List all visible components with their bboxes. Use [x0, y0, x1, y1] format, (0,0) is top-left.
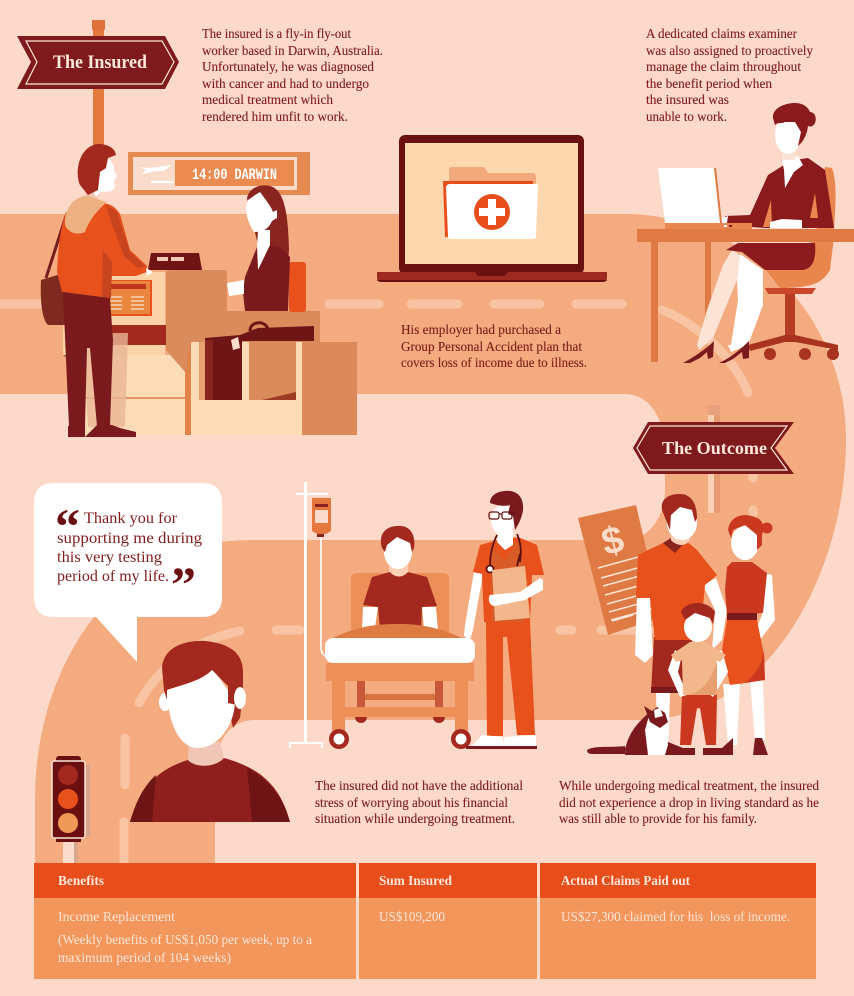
text block: no financial stress: stress of worrying about his financial [315, 795, 508, 810]
text block: no financial stress: situation while undergoing treatment. [315, 811, 515, 826]
text block: no financial stress: The insured did not have the additional [315, 778, 523, 793]
text block: claims examiner: was also assigned to proactively [646, 43, 813, 58]
text block: living standard: was still able to provide for his family. [559, 811, 757, 826]
speech bubble with quote: “ [55, 498, 80, 554]
speech bubble with quote [34, 483, 222, 662]
flight departure board: 14:00 DARWIN [192, 166, 277, 184]
icon: traffic light [52, 756, 90, 863]
text block: claims examiner: the benefit period when [646, 76, 772, 91]
speech bubble with quote: this very testing [57, 549, 162, 566]
banner: The Insured [17, 36, 179, 89]
benefits table: Actual Claims Paid out [561, 874, 690, 889]
speech bubble with quote: ” [171, 556, 196, 612]
road lane markings [0, 304, 753, 863]
text block: the insured: medical treatment which [202, 92, 333, 107]
benefits table: Benefits [58, 874, 105, 889]
laptop on desk [637, 168, 854, 242]
text block: employer plan [401, 322, 587, 370]
receipt with dollar sign: $ [598, 518, 628, 564]
person: doctor with clipboard [464, 491, 544, 749]
signpost: The Insured [17, 20, 179, 146]
benefits table: (Weekly benefits of US$1,050 per week, up to a [58, 933, 313, 948]
family: father [635, 494, 727, 755]
text block: claims examiner: manage the claim throughout [646, 59, 801, 74]
benefits table: maximum period of 104 weeks) [58, 951, 231, 966]
benefits table: Income Replacement [58, 910, 175, 925]
benefits table: US$109,200 [379, 910, 445, 925]
portrait: the insured [130, 641, 290, 822]
text block: the insured: with cancer and had to undergo [202, 76, 369, 91]
speech bubble with quote: supporting me during [57, 530, 202, 547]
text block: the insured [202, 26, 383, 124]
text block: claims examiner [646, 26, 813, 124]
speech bubble with quote: Thank you for [84, 510, 178, 527]
text block: the insured: worker based in Darwin, Australia. [202, 43, 383, 58]
person: check-in agent [227, 185, 306, 312]
benefits table [34, 863, 816, 979]
hospital bed with patient [325, 526, 475, 749]
text block: employer plan: His employer had purchased a [401, 322, 561, 337]
receipt with dollar sign [578, 505, 662, 635]
text block: claims examiner: A dedicated claims examiner [646, 26, 797, 41]
IV drip stand [290, 482, 331, 748]
text block: the insured: The insured is a fly-in fly-out [202, 26, 351, 41]
family: mother [716, 515, 775, 755]
person: traveller at counter [41, 144, 153, 437]
family: cat [587, 706, 668, 755]
desk and chair [651, 167, 839, 362]
flight departure board [128, 152, 310, 195]
suitcase with tag [205, 323, 314, 400]
text block: employer plan: Group Personal Accident plan that [401, 339, 582, 354]
icon: medical folder [443, 167, 538, 239]
benefits table: Sum Insured [379, 874, 452, 889]
check-in counter [63, 270, 357, 435]
text block: living standard: While undergoing medical treatment, the insured [559, 778, 819, 793]
laptop with medical folder [377, 135, 607, 282]
text block: no financial stress [315, 778, 523, 826]
person: claims examiner [683, 103, 834, 363]
text block: claims examiner: unable to work. [646, 109, 727, 124]
signpost: The Outcome: The Outcome [662, 438, 767, 458]
banner: The Outcome [633, 422, 794, 474]
patient [362, 526, 438, 630]
text block: the insured: Unfortunately, he was diagnosed [202, 59, 374, 74]
text block: living standard [559, 778, 819, 826]
text block: employer plan: covers loss of income due to illness. [401, 355, 587, 370]
speech bubble with quote: period of my life. [57, 568, 169, 585]
family: child [668, 603, 733, 755]
benefits table: US$27,300 claimed for his loss of income. [561, 910, 790, 925]
signpost: The Outcome [633, 405, 794, 513]
monitor [148, 253, 202, 270]
signpost: The Insured: The Insured [53, 52, 147, 73]
text block: the insured: rendered him unfit to work. [202, 109, 348, 124]
text block: living standard: did not experience a drop in living standard as he [559, 795, 819, 810]
winding road background [0, 214, 846, 863]
text block: claims examiner: the insured was [646, 92, 729, 107]
